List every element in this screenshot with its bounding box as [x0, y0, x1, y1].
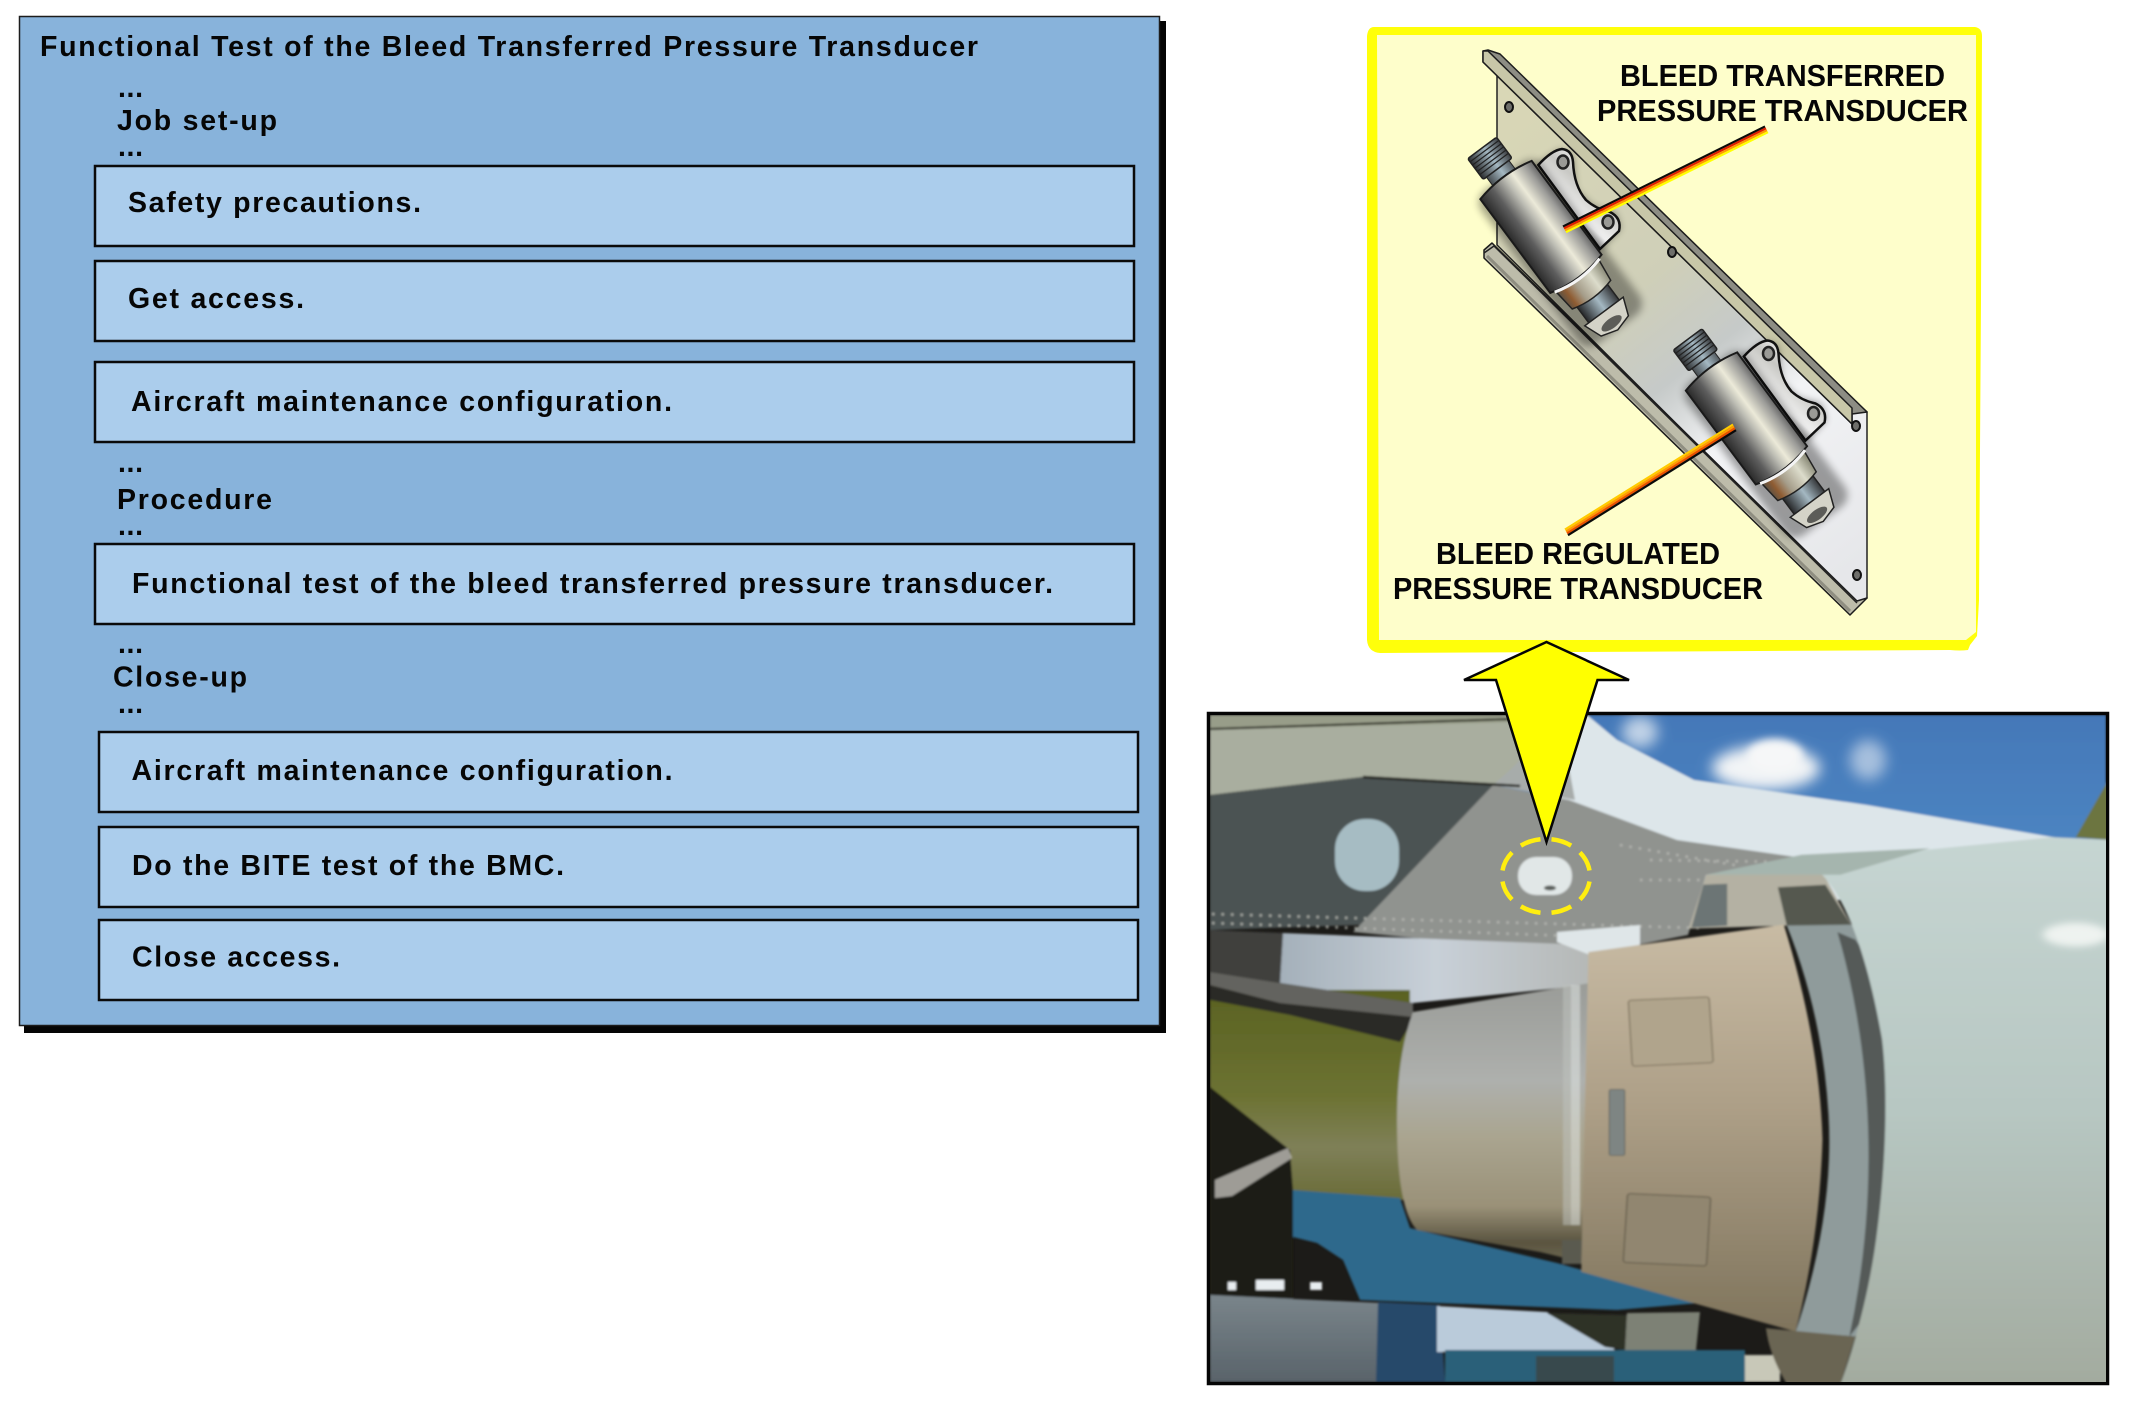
step box: close access: Close access. [132, 942, 340, 974]
panel: transducer detail [1367, 27, 1982, 653]
step box: aircraft maintenance configuration: Aircraft maintenance configuration. [132, 755, 672, 787]
shaded panel [1210, 777, 1493, 930]
transducer: bleed regulated [1657, 317, 1854, 544]
bracket plate [1497, 70, 1867, 604]
heading: panel title: Functional Test of the Bleed Transferred Pressure Transducer [40, 31, 978, 63]
step box: aircraft maintenance configuration: Aircraft maintenance configuration. [131, 386, 672, 418]
step box: functional test: Functional test of the bleed transferred pressure transducer. [132, 568, 1053, 600]
text: ellipsis: ... [118, 131, 143, 163]
heading: job set-up: Job set-up [117, 105, 277, 137]
step box: safety precautions: Safety precautions. [128, 187, 421, 219]
fan cowl [1581, 925, 1823, 1332]
ground [1743, 1353, 1782, 1382]
lower cowl lip [1766, 1328, 1855, 1384]
text: ellipsis: ... [118, 72, 143, 104]
text: ellipsis: ... [118, 628, 143, 660]
heading: close-up: Close-up [113, 662, 247, 694]
panel windows [1335, 819, 1399, 891]
step box: get access [95, 261, 1134, 341]
fan nacelle [1820, 837, 2108, 1384]
strut below wing [1547, 1313, 1627, 1350]
transducer: bleed transferred [1452, 125, 1648, 353]
illustration: bracket with transducers [1452, 50, 1867, 615]
aft fuselage upper panel [1210, 715, 1560, 795]
strut at nacelle [1688, 872, 1855, 932]
ground support cart [1445, 1350, 1745, 1382]
dark wedge under pylon [1210, 985, 1412, 1042]
sky [1500, 715, 2106, 850]
rivet rows [1212, 845, 1790, 937]
text: ellipsis: ... [118, 688, 143, 720]
panel: job card procedure [20, 16, 1166, 1033]
label: bleed regulated pressure transducer: BLEED REGULATED [1436, 537, 1720, 571]
blue fuselage belly [1293, 1190, 1700, 1310]
pylon and wing upper surface [1561, 715, 2054, 902]
lower wall [1210, 1295, 1382, 1382]
label: bleed regulated pressure transducer: PRESSURE TRANSDUCER [1393, 572, 1763, 606]
label: bleed transferred pressure transducer: BLEED TRANSFERRED [1620, 59, 1945, 93]
heading: procedure: Procedure [117, 484, 272, 516]
top flange [1483, 50, 1867, 424]
step box: BITE test: Do the BITE test of the BMC. [132, 850, 564, 882]
label: bleed regulated pressure transducer [1393, 537, 1763, 606]
lower flange [1484, 243, 1867, 615]
step box: BITE test [99, 827, 1138, 907]
access panels on cowl [1628, 997, 1713, 1066]
callout: dashed circle around transducer access [1502, 839, 1590, 913]
sunlit grey panel [1353, 785, 1796, 955]
label: bleed transferred pressure transducer: PRESSURE TRANSDUCER [1597, 94, 1968, 128]
winglet edge [2076, 780, 2108, 840]
mounting holes [1505, 102, 1861, 580]
core nozzle [1397, 983, 1590, 1262]
leader line: bleed regulated [1565, 424, 1736, 535]
step box: close access [99, 920, 1138, 1000]
fan exit duct [1786, 923, 1870, 1338]
step box: aircraft maintenance configuration [95, 362, 1134, 442]
step box: aircraft maintenance configuration [99, 732, 1138, 812]
olive fuselage [1210, 990, 1410, 1200]
text: ellipsis: ... [118, 510, 143, 542]
text: ellipsis: ... [118, 447, 143, 479]
photo: aircraft engine and pylon [1208, 714, 2108, 1384]
lit lower pylon [1280, 933, 1590, 1003]
distant sky [1437, 1306, 1615, 1352]
label: bleed transferred pressure transducer [1597, 59, 1968, 128]
hangar shadow [1210, 1087, 1293, 1300]
arrow: from photo to detail [1464, 642, 1629, 842]
step box: get access: Get access. [128, 283, 304, 315]
dark block [1210, 930, 1283, 983]
step box: functional test [95, 544, 1134, 624]
leader line: bleed transferred [1563, 126, 1768, 232]
step box: safety precautions [95, 166, 1134, 246]
